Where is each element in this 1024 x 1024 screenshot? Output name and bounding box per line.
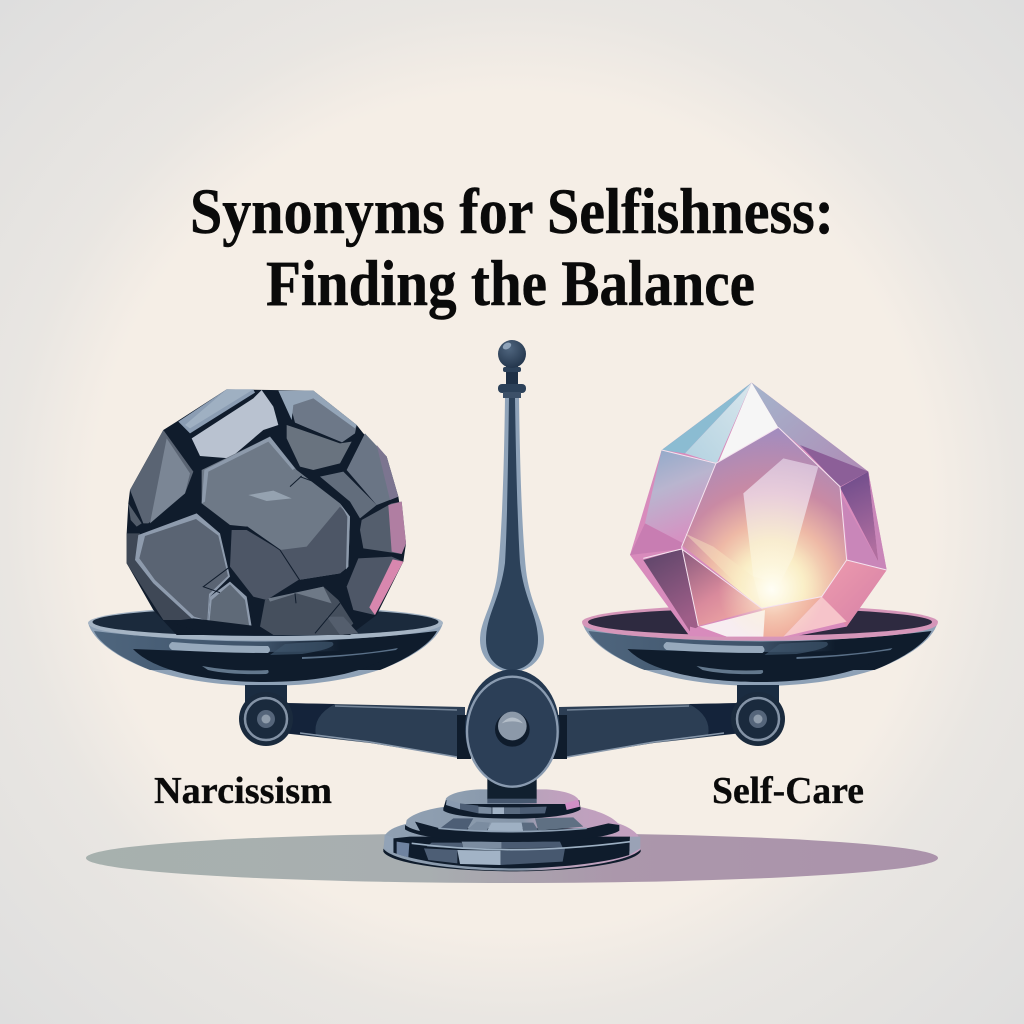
left dish rim	[90, 623, 441, 639]
icon: cracked grey rock	[127, 389, 406, 635]
right dish front	[582, 623, 938, 686]
right dish back	[582, 605, 938, 639]
scale: left beam	[282, 703, 471, 759]
left dish back	[88, 606, 443, 640]
scale: central post	[480, 340, 544, 672]
left dish front	[88, 623, 443, 686]
scale: right beam	[553, 703, 742, 759]
right dish rim	[584, 623, 936, 639]
icon: glowing pink crystal	[630, 383, 887, 643]
label: Narcissism: Narcissism	[154, 770, 332, 812]
right bracket and pivot wheel	[731, 685, 785, 746]
left bracket and pivot wheel	[239, 685, 293, 746]
label: Self-Care: Self-Care	[712, 770, 864, 812]
ground shadow	[86, 833, 938, 883]
title: Finding the Balance	[266, 248, 755, 320]
scale: stepped base	[383, 777, 641, 871]
title: Synonyms for Selfishness:	[190, 176, 834, 248]
scale: central hub	[465, 669, 560, 787]
title	[190, 176, 834, 320]
